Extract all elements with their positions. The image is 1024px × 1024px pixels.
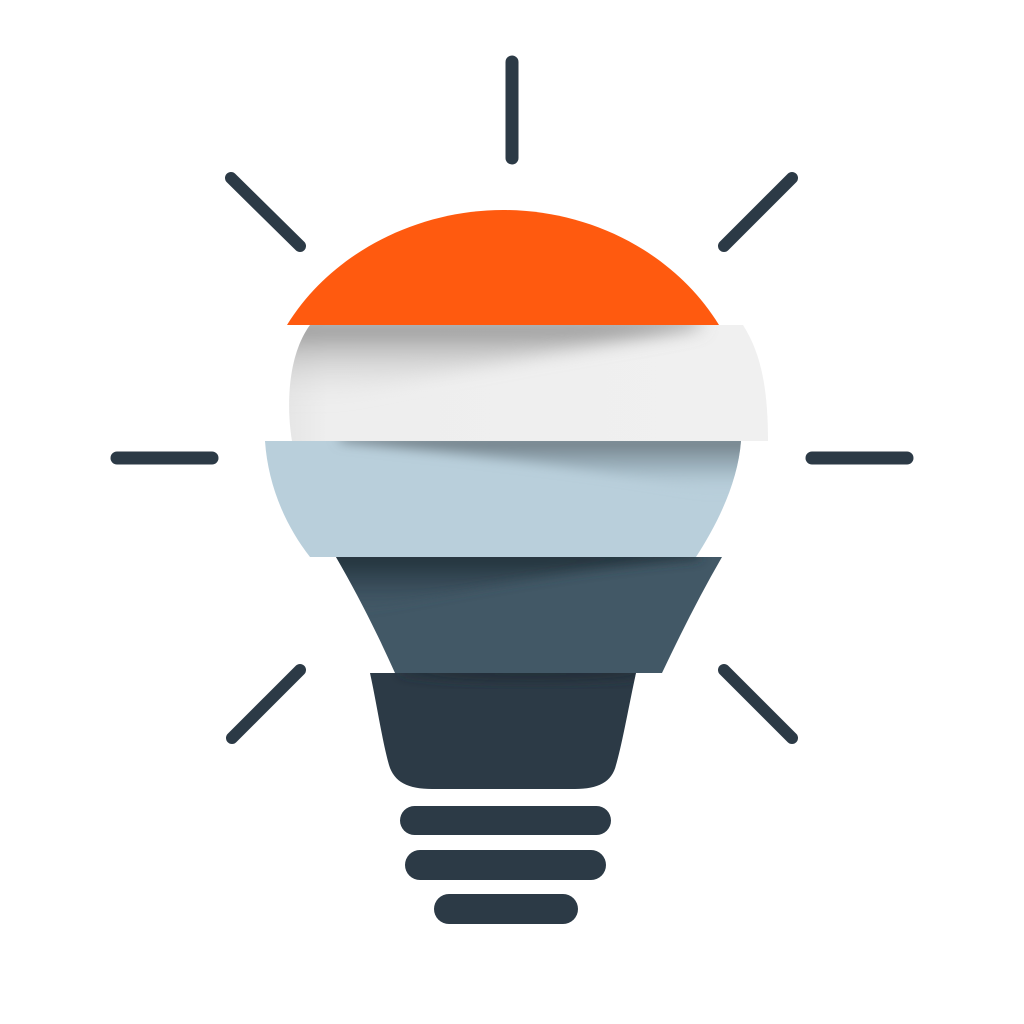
- infographic: segmented light bulb: [110, 56, 914, 924]
- ray: lower right: [724, 670, 792, 738]
- ray: top: [506, 62, 518, 158]
- segment: slate band: [320, 550, 722, 673]
- ray: right: [812, 452, 907, 464]
- rays: [117, 62, 907, 738]
- ray: left: [117, 452, 212, 464]
- segment: light grey band: [270, 318, 768, 441]
- ray: upper left: [231, 178, 300, 246]
- segment: orange top: [287, 210, 719, 325]
- segment: dark neck: [370, 668, 640, 789]
- ray: upper right: [724, 178, 792, 246]
- ray: lower left: [232, 670, 300, 738]
- bulb base threads: [400, 806, 611, 924]
- segment: pale blue band: [265, 434, 760, 557]
